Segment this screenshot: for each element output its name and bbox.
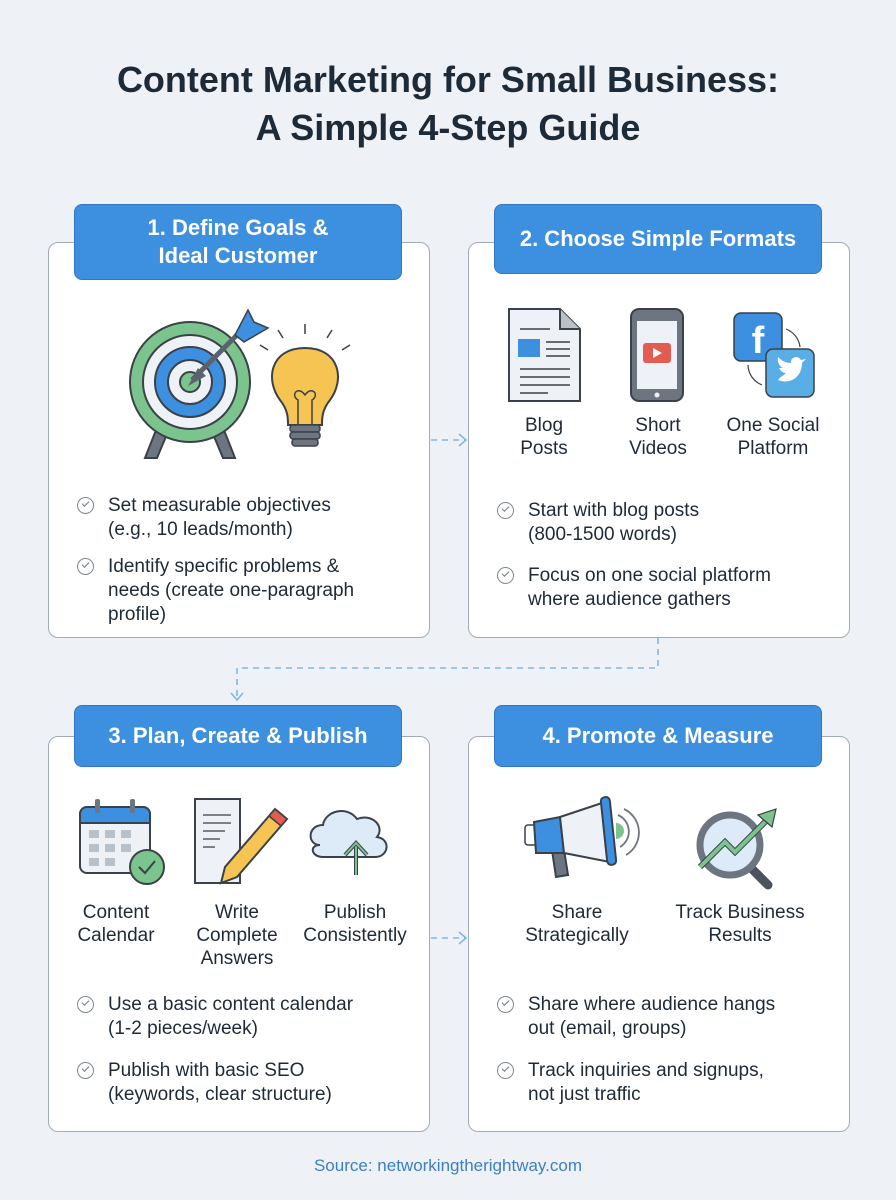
- label: Content Calendar: Calendar: [77, 925, 155, 946]
- label: Track Business Results: [675, 902, 805, 946]
- label: One Social Platform: [727, 415, 819, 459]
- icons: formats: f: [752, 320, 765, 362]
- label: Publish Consistently: Publish: [324, 902, 386, 923]
- label: Share Strategically: [525, 902, 629, 946]
- bullets: step 4: not just traffic: [528, 1084, 641, 1105]
- panel: step 3: [48, 736, 430, 1132]
- bullets: step 3: [77, 994, 353, 1105]
- heading: step 4: [494, 705, 822, 767]
- bullets: step 4: Share where audience hangs: [528, 994, 775, 1015]
- label: Blog Posts: Posts: [520, 438, 568, 459]
- label: Write Complete Answers: Complete: [196, 925, 278, 946]
- label: Blog Posts: [520, 415, 568, 459]
- label: Blog Posts: Blog: [525, 415, 563, 436]
- title: A Simple 4-Step Guide: [256, 107, 640, 148]
- bullets: step 1: Set measurable objectives: [108, 495, 331, 516]
- icons: formats: [508, 308, 815, 402]
- label: Write Complete Answers: Write: [215, 902, 259, 923]
- icons: megaphone and magnifier: [524, 796, 777, 890]
- panel: step 4: [468, 736, 850, 1132]
- bullets: step 3: Publish with basic SEO: [108, 1060, 304, 1081]
- bullets: step 2: [497, 500, 771, 610]
- icon: target and lightbulb: [129, 308, 350, 459]
- bullets: step 3: Use a basic content calendar: [108, 994, 353, 1015]
- bullets: step 2: where audience gathers: [528, 589, 731, 610]
- label: Short Videos: Short: [635, 415, 681, 436]
- heading: step 2: [494, 204, 822, 274]
- heading: step 1: [74, 204, 402, 280]
- bullets: step 2: (800-1500 words): [528, 524, 677, 545]
- bullets: step 3: (1-2 pieces/week): [108, 1018, 258, 1039]
- bullets: step 1: (e.g., 10 leads/month): [108, 519, 293, 540]
- panel: step 2: [468, 242, 850, 638]
- label: Content Calendar: [77, 902, 155, 946]
- title: [117, 59, 779, 148]
- heading: step 2: 2. Choose Simple Formats: [520, 226, 796, 251]
- heading: step 3: 3. Plan, Create & Publish: [108, 723, 368, 748]
- label: One Social Platform: One Social: [727, 415, 819, 436]
- label: Track Business Results: Track Business: [675, 902, 805, 923]
- heading: step 3: [74, 705, 402, 767]
- label: Publish Consistently: Consistently: [303, 925, 407, 946]
- bullets: step 1: profile): [108, 604, 166, 625]
- label: Share Strategically: Share: [552, 902, 602, 923]
- bullets: step 1: needs (create one-paragraph: [108, 580, 354, 601]
- bullets: step 4: [497, 994, 775, 1105]
- title: Content Marketing for Small Business:: [117, 59, 779, 100]
- label: One Social Platform: Platform: [738, 438, 808, 459]
- label: Short Videos: [629, 415, 687, 459]
- label: Write Complete Answers: [196, 902, 278, 969]
- bullets: step 3: (keywords, clear structure): [108, 1084, 332, 1105]
- label: Short Videos: Videos: [629, 438, 687, 459]
- panel: step 1: [48, 242, 430, 638]
- bullets: step 2: Start with blog posts: [528, 500, 699, 521]
- heading: step 4: 4. Promote & Measure: [542, 723, 774, 748]
- heading: step 1: 1. Define Goals &: [148, 215, 328, 240]
- bullets: step 4: out (email, groups): [528, 1018, 686, 1039]
- label: Track Business Results: Results: [708, 925, 772, 946]
- source footer: Source: networkingtherightway.com: [314, 1156, 582, 1175]
- bullets: step 1: Identify specific problems &: [108, 556, 339, 577]
- label: Write Complete Answers: Answers: [201, 948, 273, 969]
- heading: step 1: Ideal Customer: [159, 243, 317, 268]
- bullets: step 2: Focus on one social platform: [528, 565, 771, 586]
- label: Content Calendar: Content: [83, 902, 149, 923]
- bullets: step 4: Track inquiries and signups,: [528, 1060, 764, 1081]
- bullets: step 1: [77, 495, 354, 625]
- label: Share Strategically: Strategically: [525, 925, 629, 946]
- label: Publish Consistently: [303, 902, 407, 946]
- icons: plan create publish: [79, 798, 388, 885]
